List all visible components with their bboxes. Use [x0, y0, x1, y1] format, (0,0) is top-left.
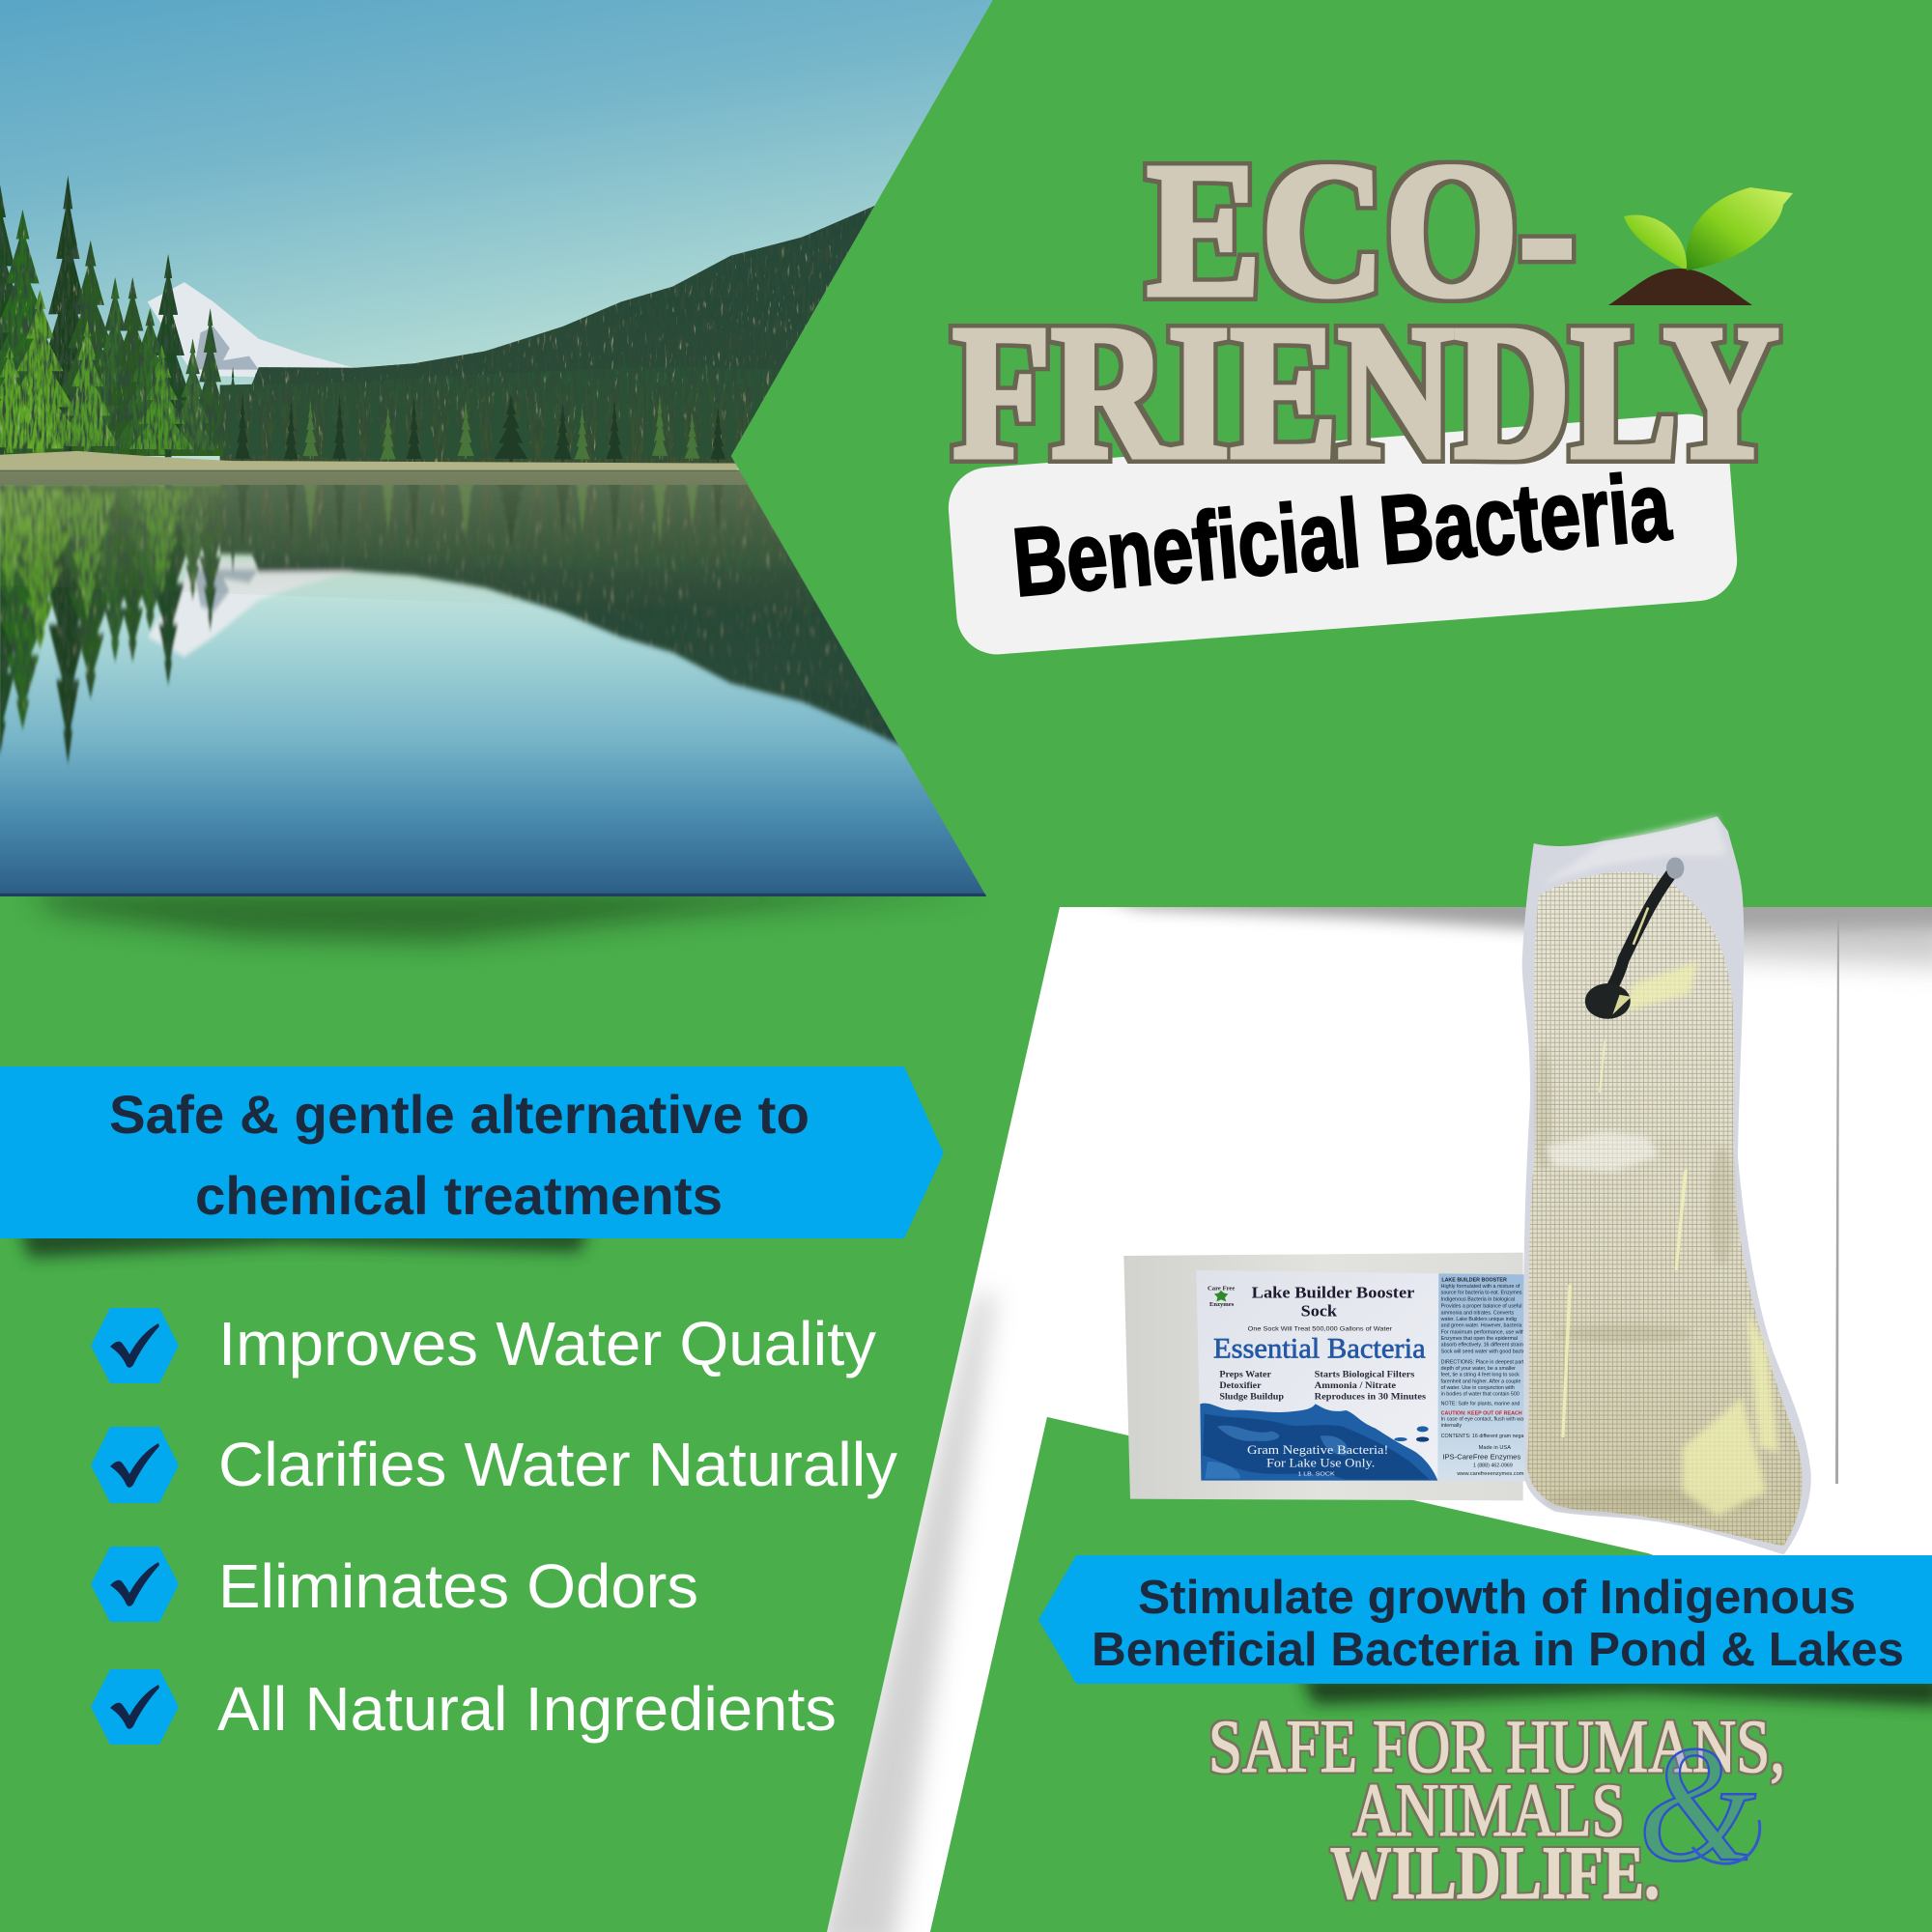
label side panel text: feet, tie a string 4 feet long to sock	[1441, 1373, 1520, 1378]
item: Clarifies Water Naturally: Clarifies Water Naturally	[218, 1430, 897, 1499]
label side panel text: in bodies of water that contain 500	[1441, 1392, 1520, 1398]
forest and mountain scene	[0, 160, 970, 464]
label side panel text: Indigenous Bacteria in biological	[1441, 1296, 1515, 1302]
item: Eliminates Odors: Eliminates Odors	[218, 1551, 698, 1621]
line 2: ANIMALS	[1352, 1768, 1625, 1852]
ampersand: &	[1638, 1713, 1756, 1896]
banner text line 1: Stimulate growth of Indigenous	[1138, 1572, 1856, 1624]
label side panel text: LAKE BUILDER BOOSTER	[1441, 1278, 1507, 1284]
label coverage line: One Sock Will Treat 500,000 Gallons of Water	[1248, 1325, 1393, 1332]
banner text line 1: Safe & gentle alternative to	[109, 1084, 810, 1145]
box body	[1123, 1253, 1523, 1500]
shadow under left banner	[19, 1227, 589, 1258]
banner text line 2: Beneficial Bacteria in Pond & Lakes	[1092, 1624, 1904, 1676]
label side panel text: IPS-CareFree Enzymes	[1442, 1453, 1520, 1462]
right banner	[1038, 1555, 1932, 1684]
item: All Natural Ingredients: All Natural Ingredients	[217, 1674, 837, 1744]
product: box	[1123, 1253, 1532, 1500]
product: burlap sock in plastic bag	[1522, 816, 1811, 1554]
label bullets: Ammonia / Nitrate	[1315, 1380, 1397, 1391]
subtitle card	[946, 412, 1740, 657]
drawstring	[1585, 857, 1684, 1019]
label side panel text: NOTE: Safe for plants, marine and	[1441, 1402, 1520, 1407]
label side panel text: Highly formulated with a mixture of	[1441, 1284, 1520, 1290]
label water caption: For Lake Use Only.	[1266, 1457, 1375, 1470]
shadow under right banner	[1301, 1676, 1932, 1706]
label bullets: Preps Water	[1219, 1370, 1272, 1380]
burlap weave	[1527, 871, 1803, 1546]
label side panel text: 1 (888) 462-0969	[1473, 1463, 1513, 1469]
label side panel	[1437, 1273, 1526, 1481]
label logo: Care Free	[1208, 1286, 1235, 1293]
lake reflection	[0, 475, 900, 765]
title line 2: FRIENDLY	[952, 286, 1779, 499]
label side panel text: CONTENTS: 16 different gram negative	[1441, 1434, 1532, 1439]
label side panel text: internally	[1441, 1423, 1462, 1429]
label bullets: Detoxifier	[1219, 1380, 1262, 1391]
label side panel text: For maximum performance, use with	[1441, 1329, 1524, 1335]
shadow below photo	[29, 891, 985, 942]
label side panel text: Enzymes that open the epidermal	[1441, 1336, 1518, 1342]
photo sky	[0, 0, 1035, 474]
title: ECO-FRIENDLY	[952, 124, 1779, 499]
plant icon: sprout in soil	[1608, 187, 1793, 305]
item: Improves Water Quality: Improves Water Quality	[218, 1309, 876, 1378]
label logo: Enzymes	[1209, 1301, 1235, 1308]
box label	[1196, 1270, 1532, 1481]
title line 1: ECO-	[1147, 124, 1576, 337]
label heading: Lake Builder Booster	[1252, 1283, 1415, 1301]
label bullets: Sludge Buildup	[1219, 1392, 1284, 1403]
label side panel text: depth of your water, be a smaller	[1441, 1366, 1516, 1372]
label side panel text: Provides a proper balance of useful	[1441, 1304, 1521, 1310]
photo bottom edge	[0, 894, 1035, 897]
reflected light tint	[0, 471, 840, 616]
line 1: SAFE FOR HUMANS,	[1208, 1704, 1785, 1788]
lake water	[0, 469, 1035, 899]
label side panel text: of water. Use in conjunction with	[1441, 1385, 1515, 1391]
label logo	[1208, 1286, 1235, 1308]
label side panel text: DIRECTIONS: Place in deepest part	[1441, 1359, 1524, 1365]
label bullets: Starts Biological Filters	[1315, 1370, 1415, 1380]
label side panel text: ammonia and nitrates. Converts	[1441, 1311, 1515, 1317]
label water caption: 1 LB. SOCK	[1297, 1471, 1335, 1477]
panel: green lower-right wedge	[930, 1417, 1932, 1932]
plastic bag	[1522, 816, 1811, 1554]
label side panel text: Sock will seed water with good bacteria	[1441, 1349, 1531, 1354]
label product name: Essential Bacteria	[1213, 1334, 1426, 1365]
label side panel text: CAUTION: KEEP OUT OF REACH	[1441, 1411, 1522, 1417]
label side panel text: water. Lake Builders unique indig	[1441, 1317, 1517, 1322]
label water splash	[1200, 1404, 1437, 1481]
shore	[0, 450, 738, 470]
label side panel text: source for bacteria to eat. Enzymes	[1441, 1291, 1522, 1296]
label side panel text: Made in USA	[1479, 1445, 1511, 1451]
subtitle: Beneficial Bacteria: Beneficial Bacteria	[1009, 452, 1675, 617]
soft folds in the sock	[1536, 1043, 1761, 1515]
label side panel text: and green water. However, bacteria	[1441, 1323, 1522, 1329]
panel: white background with product	[816, 894, 1932, 1932]
thin vertical rule	[1835, 915, 1839, 1484]
line 3: WILDLIFE.	[1330, 1831, 1660, 1915]
label water caption	[1247, 1443, 1388, 1477]
benefit list	[91, 1308, 897, 1745]
banner text line 2: chemical treatments	[195, 1165, 723, 1226]
panel: lake photo	[0, 0, 1035, 899]
label bullets	[1219, 1370, 1426, 1403]
label side panel text: In case of eye contact, flush with water	[1441, 1417, 1529, 1423]
shadow on white under the green band	[816, 894, 1932, 1932]
label side panel text	[1441, 1278, 1532, 1477]
label side panel text: farenheit and higher. After a couple	[1441, 1378, 1520, 1384]
label heading second line: Sock	[1301, 1302, 1338, 1321]
safe for humans text	[1208, 1704, 1785, 1915]
strip at waterline	[0, 470, 777, 485]
label side panel text: absorb effectively. 16 different strains	[1441, 1343, 1526, 1349]
burlap sock	[1527, 871, 1803, 1546]
label bullets: Reproduces in 30 Minutes	[1315, 1392, 1426, 1403]
label side panel text: www.carefreeenzymes.com	[1456, 1471, 1524, 1477]
bag highlights	[1624, 962, 1778, 1517]
label water caption: Gram Negative Bacteria!	[1247, 1443, 1388, 1457]
left banner	[0, 1066, 944, 1238]
